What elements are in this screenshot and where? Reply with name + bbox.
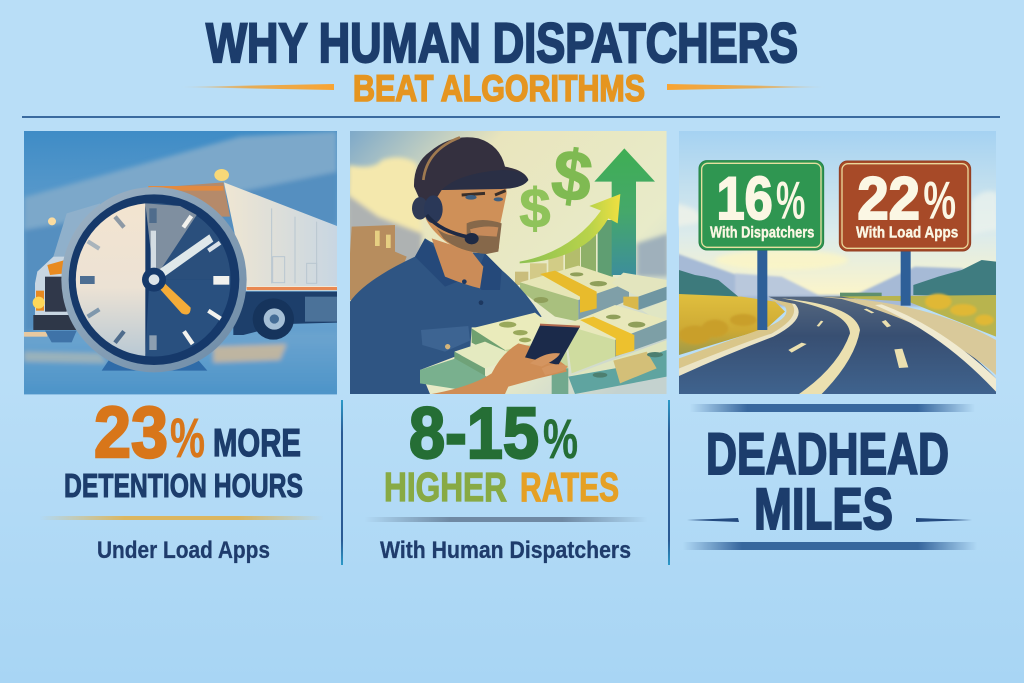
stat: 8-15% higher rates: RATES bbox=[520, 464, 619, 510]
icon: dollar signs: $ bbox=[519, 176, 551, 239]
icon: back stacks of cash bbox=[520, 266, 667, 394]
stat: 23% more detention hours: % bbox=[170, 406, 205, 469]
stat: deadhead miles bbox=[687, 422, 972, 542]
sign: load apps 22%: 22 bbox=[857, 165, 920, 232]
icon: front stacks of cash bbox=[420, 313, 568, 394]
panel: truck and clock illustration bbox=[20, 131, 340, 397]
sign: dispatchers 16%: 16 bbox=[717, 165, 773, 232]
icon: analog clock bbox=[61, 187, 247, 372]
icon: dollar signs: $ bbox=[547, 134, 597, 217]
sign: dispatchers 16%: % bbox=[776, 171, 805, 230]
stat: 8-15% higher rates: HIGHER bbox=[384, 464, 507, 510]
stat: 8-15% higher rates: % bbox=[543, 407, 578, 470]
stat: deadhead miles: MILES bbox=[754, 477, 893, 542]
panel: road and signs illustration bbox=[675, 131, 998, 394]
caption: under load apps: Under Load Apps bbox=[97, 537, 270, 564]
stat: 8-15% higher rates: 8-15 bbox=[409, 394, 539, 474]
sign: load apps 22% bbox=[839, 161, 971, 306]
caption: with human dispatchers: With Human Dispatchers bbox=[380, 537, 631, 564]
sign: load apps 22%: % bbox=[923, 171, 956, 230]
title: WHY HUMAN DISPATCHERS bbox=[206, 11, 798, 74]
panel: dispatcher illustration bbox=[348, 131, 668, 394]
sign: load apps 22%: With Load Apps bbox=[856, 224, 958, 241]
stat: 23% more detention hours: DETENTION HOURS bbox=[64, 467, 303, 504]
sign: dispatchers 16%: With Dispatchers bbox=[710, 224, 814, 241]
icon: dispatcher person bbox=[350, 137, 542, 394]
icon: hand holding phone bbox=[432, 325, 580, 394]
icon: dollar signs bbox=[520, 146, 592, 232]
stat: 8-15% higher rates bbox=[384, 394, 619, 510]
road bbox=[679, 297, 996, 394]
sign: dispatchers 16% bbox=[699, 161, 824, 330]
stat: 23% more detention hours bbox=[64, 393, 303, 504]
stat: 23% more detention hours: 23 bbox=[94, 393, 168, 473]
stat: 23% more detention hours: MORE bbox=[213, 422, 301, 465]
icon: semi truck bbox=[33, 169, 337, 342]
subtitle: BEAT ALGORITHMS bbox=[353, 68, 645, 109]
subtitle bbox=[178, 68, 828, 109]
icon: rising bars and arrow bbox=[515, 148, 655, 285]
